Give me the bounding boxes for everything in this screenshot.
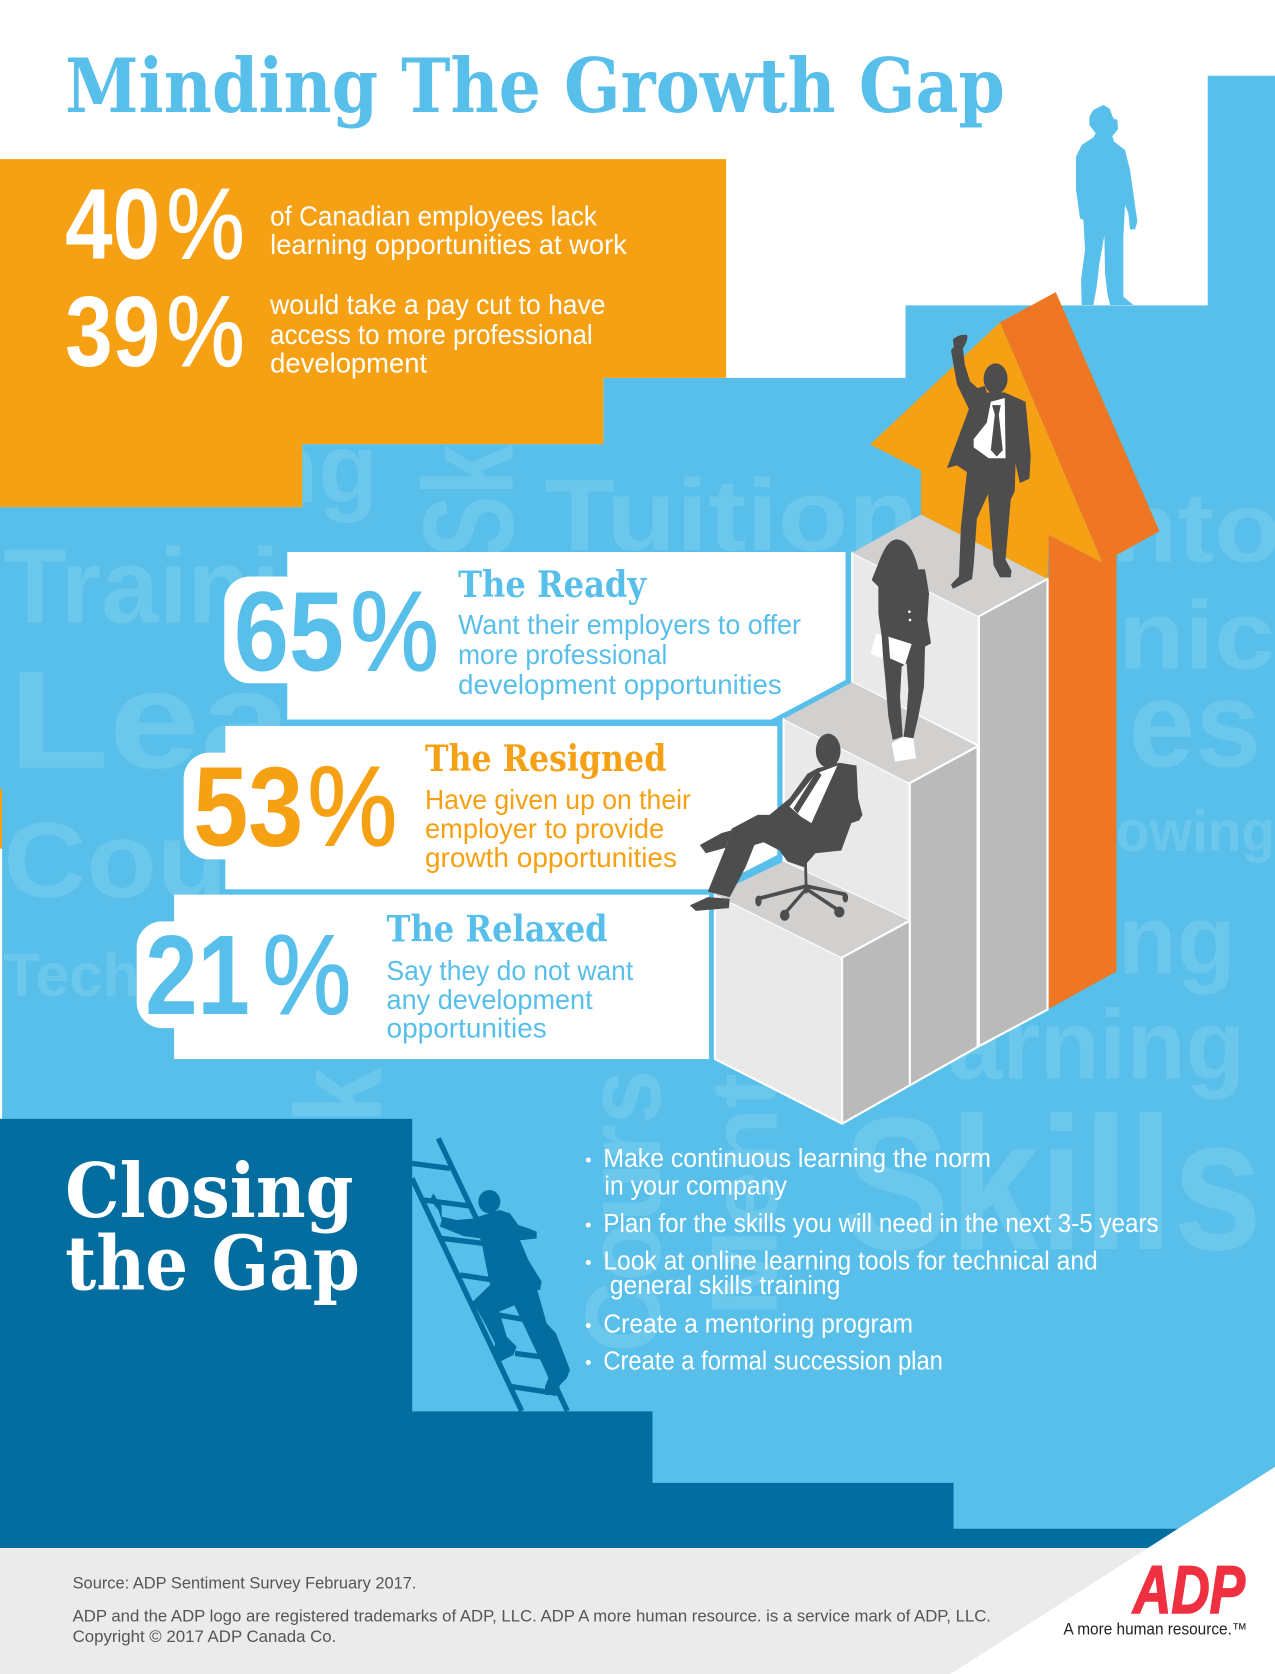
- background skill words: nto: [1111, 473, 1275, 584]
- background skill words: Sk: [398, 444, 541, 557]
- stat: 39%: access to more professional: [270, 319, 593, 350]
- logo: ADP: A more human resource.™: [1064, 1620, 1247, 1638]
- stat: 40%: 40: [65, 168, 160, 280]
- heading: The Resigned: The Resigned: [425, 737, 666, 780]
- description: The Relaxed: any development: [387, 984, 593, 1015]
- background skill words: Ment: [691, 1073, 796, 1316]
- figure: man climbing ladder: [412, 1138, 570, 1411]
- list: recommendations: •: [585, 1315, 592, 1335]
- stat: 40%: learning opportunities at work: [270, 229, 627, 260]
- background skill words: nic: [1118, 582, 1275, 689]
- list: recommendations: Create a mentoring program: [603, 1310, 913, 1338]
- background skill words: ng: [258, 413, 378, 523]
- list: recommendations: Plan for the skills you will need in the next 3-5 years: [603, 1210, 1159, 1238]
- bar: middle step: [784, 682, 978, 1085]
- heading: The Ready: The Ready: [458, 563, 647, 606]
- panel: The Ready: [224, 552, 848, 722]
- heading: closing the gap: Closing: [65, 1147, 353, 1235]
- list: recommendations: Make continuous learning the norm: [603, 1145, 991, 1173]
- background skill words: arning: [948, 989, 1245, 1099]
- list: recommendations: •: [585, 1150, 592, 1170]
- heading: The Relaxed: The Relaxed: [387, 908, 608, 951]
- percent: 65%: 65: [234, 568, 344, 694]
- footer white corner: [950, 1467, 1275, 1674]
- percent: 53%: 53: [193, 744, 303, 870]
- description: The Relaxed: Say they do not want: [387, 955, 634, 986]
- stat: 39%: [65, 276, 605, 388]
- description: The Relaxed: opportunities: [387, 1013, 547, 1044]
- list: recommendations: Create a formal succession plan: [603, 1348, 943, 1376]
- background skill words: Cou: [3, 800, 227, 920]
- stat: 40%: [65, 168, 627, 280]
- percent: 65%: %: [350, 568, 439, 694]
- background skill words: Lea: [9, 643, 294, 798]
- description: The Ready: more professional: [458, 639, 667, 670]
- source and legal text: Source: ADP Sentiment Survey February 2017.: [73, 1574, 416, 1593]
- background skill words: Tech: [3, 941, 140, 1009]
- background skill words: Tuition: [545, 459, 918, 572]
- description: The Ready: [458, 609, 801, 700]
- description: The Resigned: employer to provide: [425, 813, 664, 844]
- list: recommendations: •: [585, 1215, 592, 1235]
- figure: woman with papers: [871, 539, 931, 762]
- background skill words: Cours: [563, 1070, 683, 1353]
- panel: closing the gap: [0, 1119, 1178, 1548]
- figure: man reclining in chair: [690, 734, 862, 921]
- source and legal text: [73, 1574, 991, 1646]
- stat: 39%: development: [270, 348, 427, 379]
- background skill words: Traini: [3, 527, 280, 645]
- title: Minding The Growth Gap: [65, 42, 1005, 130]
- description: The Ready: development opportunities: [458, 669, 782, 700]
- stat: 39%: would take a pay cut to have: [269, 289, 605, 320]
- background skill words: k: [271, 1067, 408, 1123]
- panel: headline stats: [0, 159, 726, 507]
- source and legal text: ADP and the ADP logo are registered trademarks of ADP, LLC. ADP A more human resource. is a service mark of ADP, LLC.: [73, 1607, 991, 1626]
- percent: 21%: [145, 912, 351, 1038]
- background skill words: es: [1129, 657, 1261, 794]
- bar: top step: [852, 515, 1048, 1046]
- description: The Resigned: Have given up on their: [425, 784, 691, 815]
- stat: 40%: of Canadian employees lack: [270, 200, 597, 231]
- background skill words: [3, 413, 1275, 1353]
- description: The Ready: Want their employers to offer: [458, 609, 801, 640]
- panel: The Relaxed: [137, 895, 709, 1059]
- description: The Resigned: [425, 784, 691, 873]
- source and legal text: Copyright © 2017 ADP Canada Co.: [73, 1627, 336, 1646]
- stat: 40%: %: [167, 168, 245, 280]
- list: recommendations: •: [585, 1252, 592, 1272]
- percent: 21%: %: [263, 912, 351, 1038]
- figure: blue man looking up: [1076, 105, 1137, 305]
- percent: 21%: 21: [145, 912, 250, 1038]
- list: recommendations: •: [585, 1353, 592, 1373]
- panel: The Resigned: [184, 726, 780, 891]
- percent: 65%: [234, 568, 439, 694]
- description: The Relaxed: [387, 955, 634, 1044]
- percent: 53%: %: [308, 744, 397, 870]
- background skill words: ng: [1118, 885, 1235, 995]
- chart: isometric stair bars: [715, 515, 1048, 1124]
- list: recommendations: in your company: [604, 1173, 787, 1201]
- list: recommendations: Look at online learning tools for technical and: [603, 1247, 1098, 1275]
- arrow: growth arrow: [870, 292, 1159, 1009]
- heading: closing the gap: [65, 1147, 360, 1308]
- stat: 39%: %: [167, 276, 245, 388]
- description: The Resigned: growth opportunities: [425, 842, 677, 873]
- list: recommendations: general skills training: [610, 1272, 840, 1300]
- bar: bottom step: [715, 862, 910, 1124]
- figure: cheering man: [947, 335, 1031, 589]
- percent: 53%: [193, 744, 397, 870]
- heading: closing the gap: the Gap: [65, 1220, 360, 1308]
- list: recommendations: [585, 1145, 1159, 1376]
- logo: ADP: ADP: [1131, 1553, 1245, 1628]
- footer band: [0, 1548, 1275, 1674]
- stat: 39%: 39: [65, 276, 160, 388]
- left edge slivers: [0, 789, 2, 1119]
- logo: ADP: [1064, 1553, 1247, 1638]
